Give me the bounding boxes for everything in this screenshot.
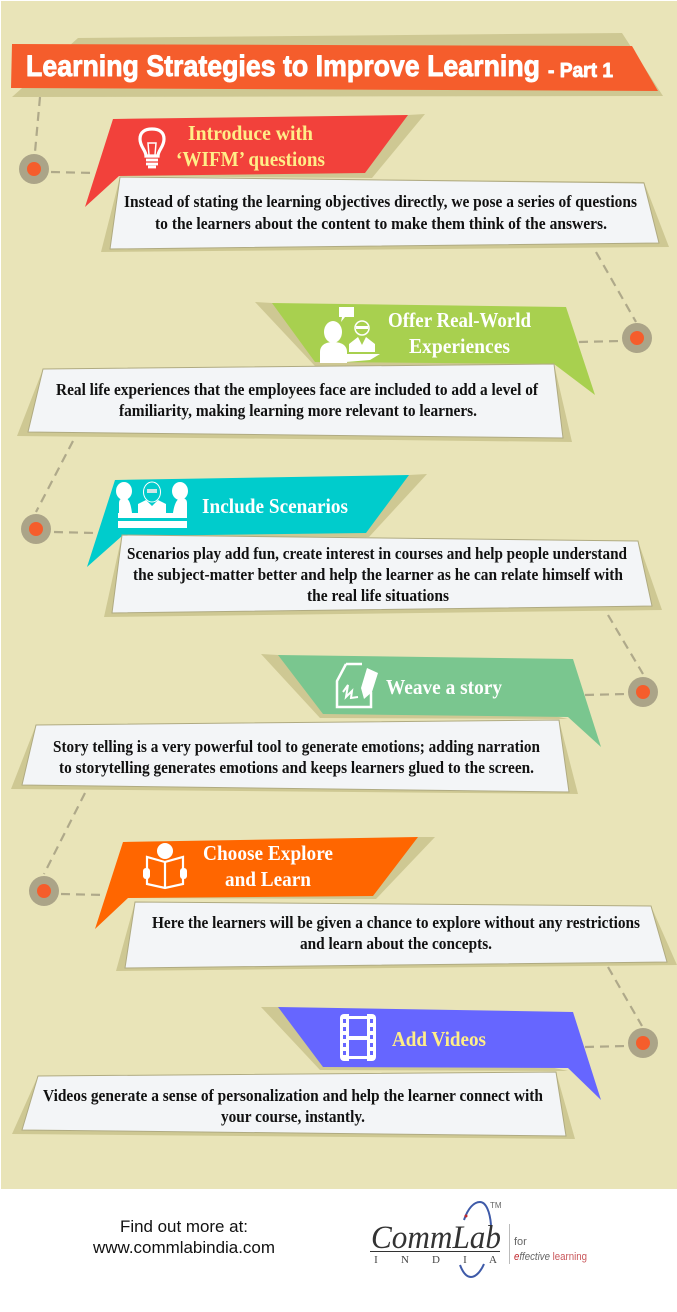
node marker 5: [29, 876, 59, 906]
heading 5: [203, 841, 333, 891]
node marker 1: [19, 154, 49, 184]
text panel 5: Here the learners will be given a chance to explore without any restrictions: [152, 913, 641, 932]
text panel 1: Instead of stating the learning objectives directly, we pose a series of questions: [124, 192, 638, 211]
text panel 6: [12, 1072, 575, 1139]
heading 1: [176, 121, 325, 171]
footer text: [92, 1217, 275, 1257]
connector: step 3 to step 4: [585, 615, 643, 695]
banner 5: [95, 837, 435, 929]
node marker 3: [21, 514, 51, 544]
title banner: Learning Strategies to Improve Learning: [26, 50, 540, 83]
text panel 3: Scenarios play add fun, create interest in courses and help people understand: [127, 544, 627, 563]
text panel 2: [17, 364, 572, 442]
heading 6: Add Videos: [392, 1027, 486, 1051]
CommLab India logo: [370, 1201, 587, 1277]
connector: step 5 to step 6: [585, 967, 642, 1047]
connector: step 4 to step 5: [44, 793, 105, 895]
banner 1: [85, 114, 425, 207]
node marker 4: [628, 677, 658, 707]
CommLab India logo: A: [489, 1254, 497, 1266]
title banner: - Part 1: [548, 60, 613, 82]
step 4: Weave a story: [11, 654, 658, 794]
step 1: Introduce with WIFM questions: [19, 114, 669, 252]
step 3: Include Scenarios: [21, 474, 662, 617]
heading 5: and Learn: [225, 867, 311, 891]
heading 4: Weave a story: [386, 675, 502, 699]
icon: conversation: [320, 307, 380, 363]
text panel 3: [104, 535, 662, 617]
CommLab India logo: TM: [490, 1201, 502, 1210]
connector: step 1 to step 2: [579, 252, 636, 342]
connector: step 2 to step 3: [36, 441, 96, 533]
step 5: Choose Explore and Learn: [29, 837, 677, 971]
footer text: www.commlabindia.com: [92, 1238, 275, 1257]
heading 2: Experiences: [409, 334, 510, 358]
node marker 2: [622, 323, 652, 353]
text panel 3: the subject-matter better and help the learner as he can relate himself with: [133, 565, 623, 584]
text panel 6: your course, instantly.: [221, 1107, 365, 1126]
text panel 1: to the learners about the content to make them think of the answers.: [155, 214, 607, 233]
icon: person reading a book: [143, 843, 187, 888]
text panel 4: Story telling is a very powerful tool to generate emotions; adding narration: [53, 737, 540, 756]
heading 2: Offer Real-World: [388, 308, 531, 332]
CommLab India logo: effective learning: [514, 1251, 587, 1263]
CommLab India logo: I: [463, 1254, 467, 1266]
icon: film strip: [340, 1014, 376, 1061]
node marker 6: [628, 1028, 658, 1058]
text panel 1: [101, 177, 669, 252]
banner 3: [87, 474, 427, 567]
text panel 5: [116, 902, 677, 971]
text panel 4: to storytelling generates emotions and keeps learners glued to the screen.: [59, 758, 534, 777]
CommLab India logo: CommLab: [371, 1220, 501, 1256]
CommLab India logo: N: [401, 1254, 409, 1266]
heading 3: Include Scenarios: [202, 494, 348, 518]
heading 1: ‘WIFM’ questions: [176, 147, 325, 171]
connector: title to step 1: [35, 97, 94, 173]
text panel 5: and learn about the concepts.: [300, 934, 492, 953]
heading 2: [388, 308, 531, 358]
banner 2: [255, 302, 595, 395]
step 2: Offer Real-World Experiences: [17, 302, 652, 442]
text panel 4: [11, 720, 578, 794]
text panel 2: Real life experiences that the employees face are included to add a level of: [56, 380, 538, 399]
banner 4: [261, 654, 601, 747]
CommLab India logo: D: [432, 1254, 440, 1266]
heading 1: Introduce with: [188, 121, 313, 145]
CommLab India logo: for: [514, 1236, 527, 1248]
icon: three people at a table: [116, 482, 188, 528]
footer text: Find out more at:: [120, 1217, 248, 1236]
heading 5: Choose Explore: [203, 841, 333, 865]
text panel 3: the real life situations: [307, 586, 450, 605]
icon: pen on paper: [337, 664, 378, 707]
banner 6: [261, 1007, 601, 1100]
CommLab India logo: I: [374, 1254, 378, 1266]
text panel 6: Videos generate a sense of personalization and help the learner connect with: [43, 1086, 543, 1105]
icon: light bulb: [140, 129, 164, 167]
step 6: Add Videos: [12, 1007, 658, 1139]
title banner: [11, 33, 663, 97]
text panel 2: familiarity, making learning more relevant to learners.: [119, 401, 477, 420]
